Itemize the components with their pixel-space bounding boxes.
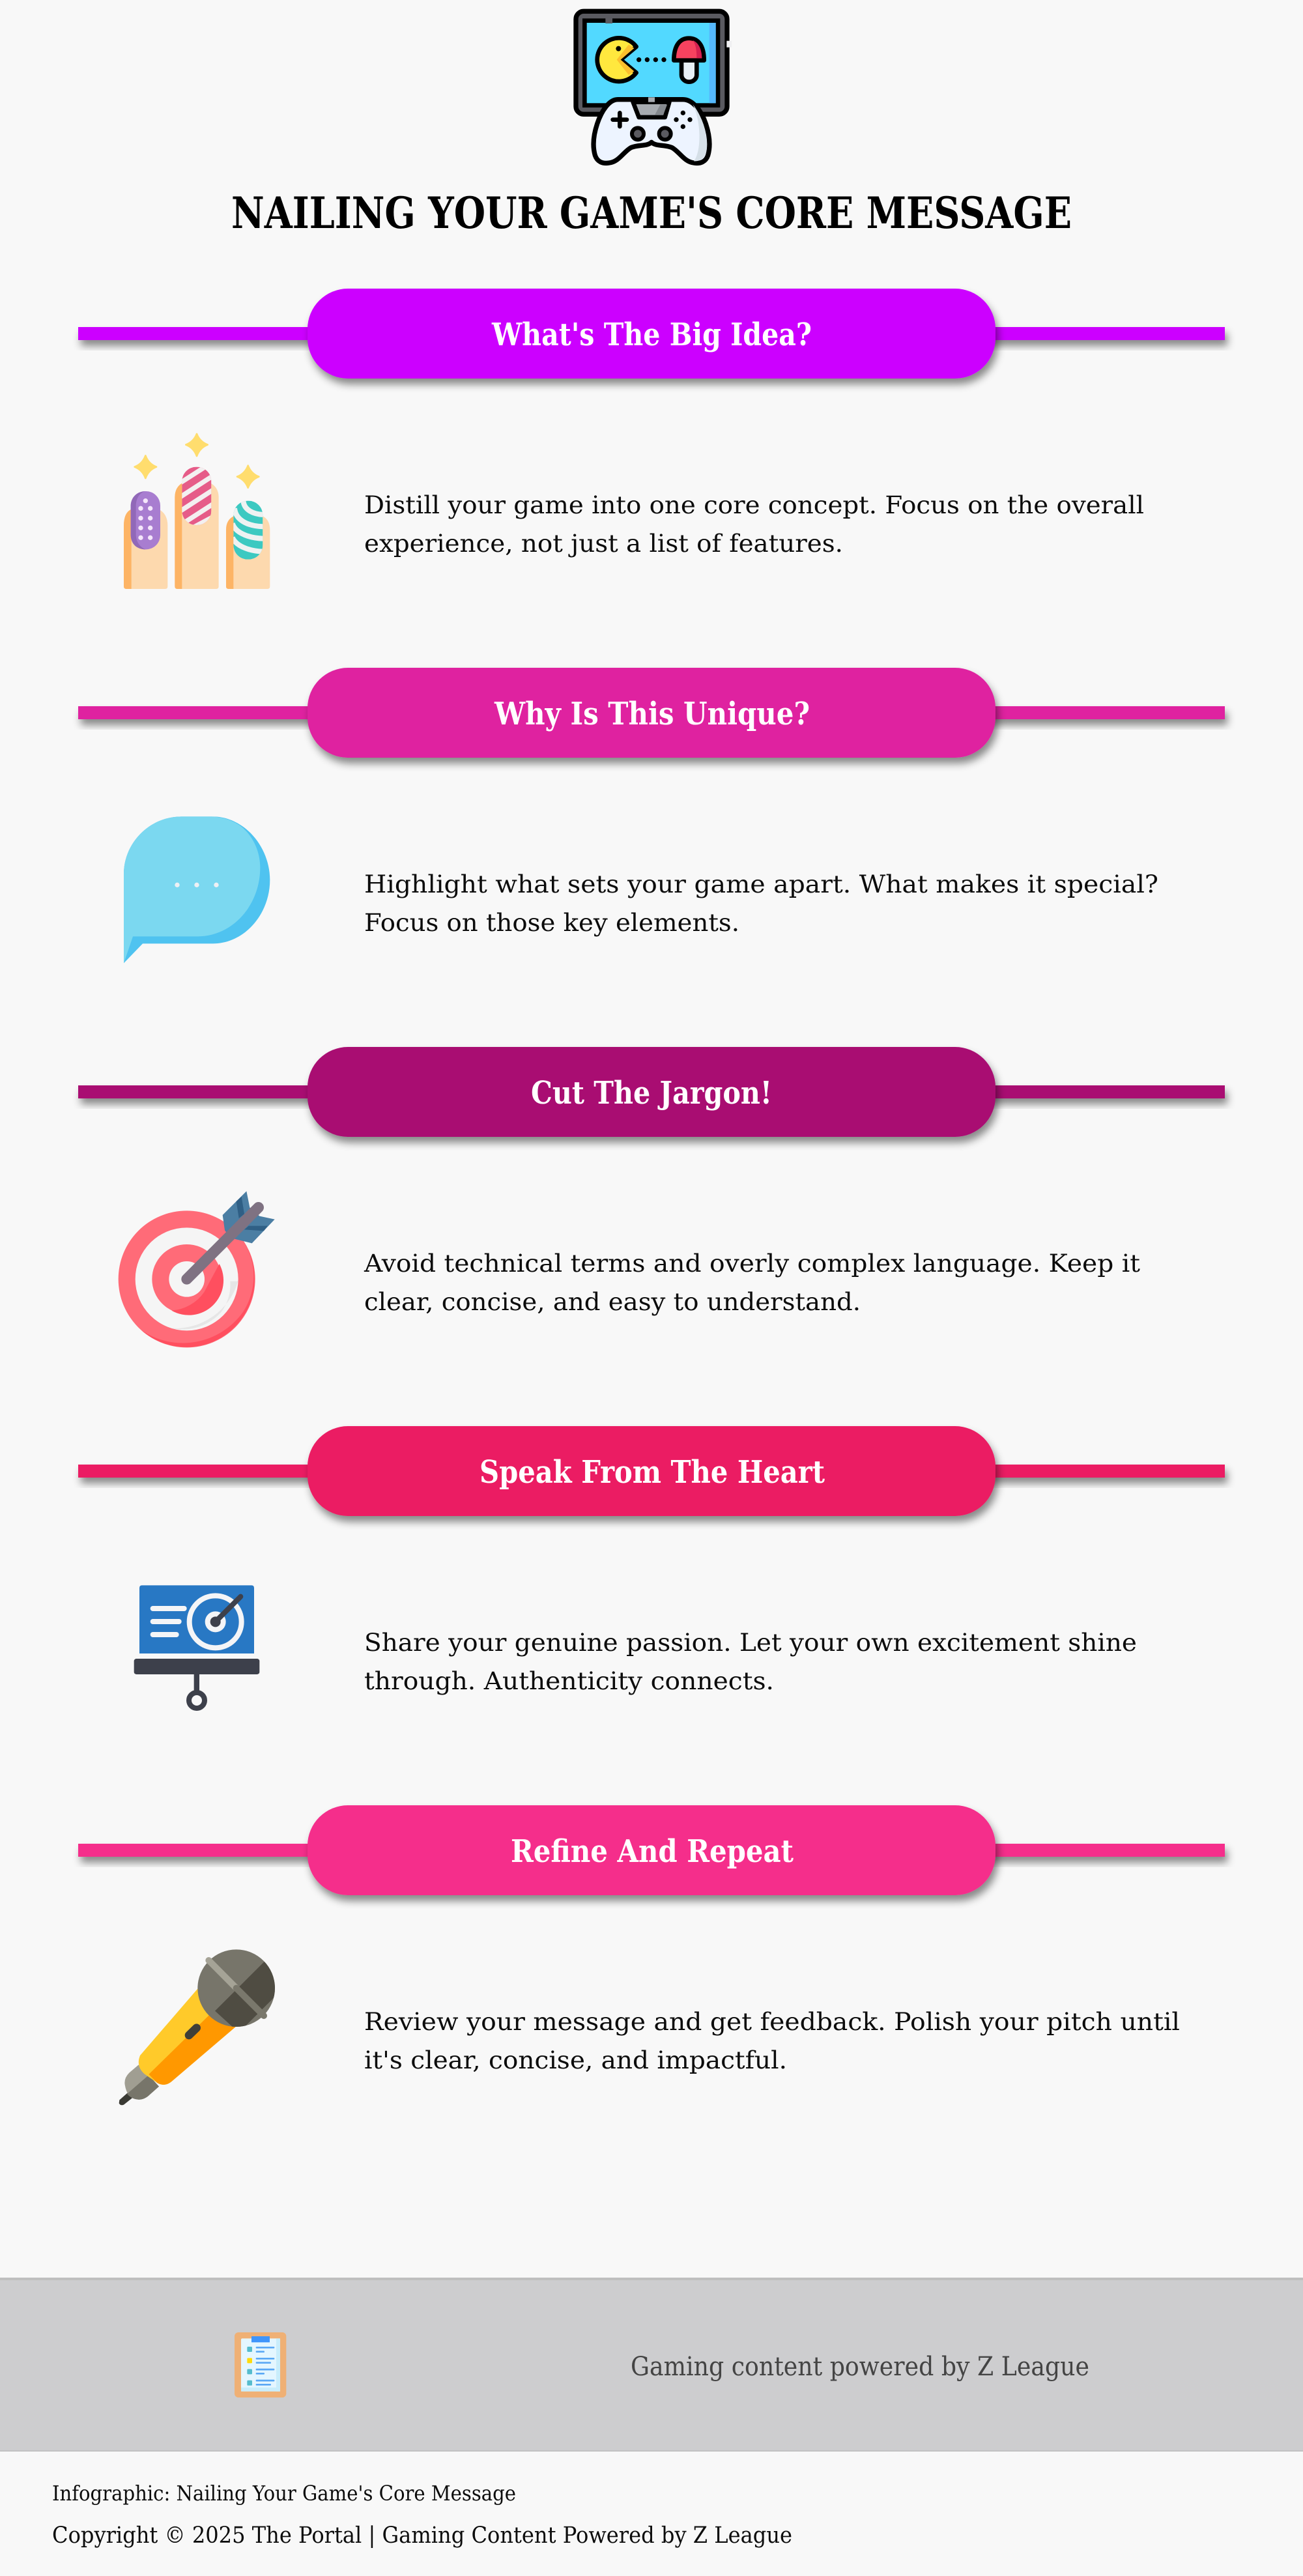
panel: what's the big idea [78,289,1225,589]
icon: game screen and controller [576,11,732,163]
text: jargon [364,1250,1140,1316]
icon: painted nails [124,434,270,589]
heading bar: why is this unique [78,668,1225,758]
heading bar: cut the jargon: Cut The Jargon! [531,1075,772,1111]
text: refine [364,2008,1180,2074]
text: big idea: Distill your game into one core concept. Focus on the overall [364,491,1144,519]
heading bar: refine and repeat: Refine And Repeat [511,1833,794,1870]
text: jargon: Avoid technical terms and overly complex language. Keep it [364,1250,1140,1278]
heading bar: speak from the heart: Speak From The Heart [480,1454,825,1491]
panel: speak from the heart [78,1426,1225,1708]
footer caption: Infographic: Nailing Your Game's Core Message [52,2481,516,2506]
text: refine: Review your message and get feedback. Polish your pitch until [364,2008,1180,2036]
text: big idea: experience, not just a list of features. [364,530,843,558]
text: heart [364,1629,1137,1695]
icon: presentation board [134,1585,259,1708]
icon: speech bubble [124,816,270,963]
panel: why is this unique [78,668,1225,963]
icon: target with arrow [119,1191,275,1347]
heading bar: refine and repeat [78,1805,1225,1895]
heading bar: what's the big idea [78,289,1225,379]
text: heart: Share your genuine passion. Let your own excitement shine [364,1629,1137,1657]
heading bar: cut the jargon [78,1047,1225,1137]
text: big idea [364,491,1144,558]
heading bar: speak from the heart [78,1426,1225,1516]
text: jargon: clear, concise, and easy to understand. [364,1288,861,1316]
icon: clipboard checklist [235,2332,286,2397]
powered-by text: Gaming content powered by Z League [631,2352,1089,2382]
panel: footer band [0,2278,1303,2452]
heading bar: why is this unique: Why Is This Unique? [494,696,810,732]
title: NAILING YOUR GAME'S CORE MESSAGE [231,188,1072,238]
panel: cut the jargon [78,1047,1225,1347]
text: refine: it's clear, concise, and impactful. [364,2046,787,2074]
text: heart: through. Authenticity connects. [364,1667,774,1695]
text: unique: Highlight what sets your game apart. What makes it special? [364,870,1158,898]
heading bar: what's the big idea: What's The Big Idea? [491,317,812,353]
text: unique [364,870,1158,937]
text: unique: Focus on those key elements. [364,909,739,937]
panel: refine and repeat [78,1805,1225,2105]
footer copyright: Copyright © 2025 The Portal | Gaming Content Powered by Z League [52,2523,792,2549]
icon: microphone [119,1949,287,2105]
